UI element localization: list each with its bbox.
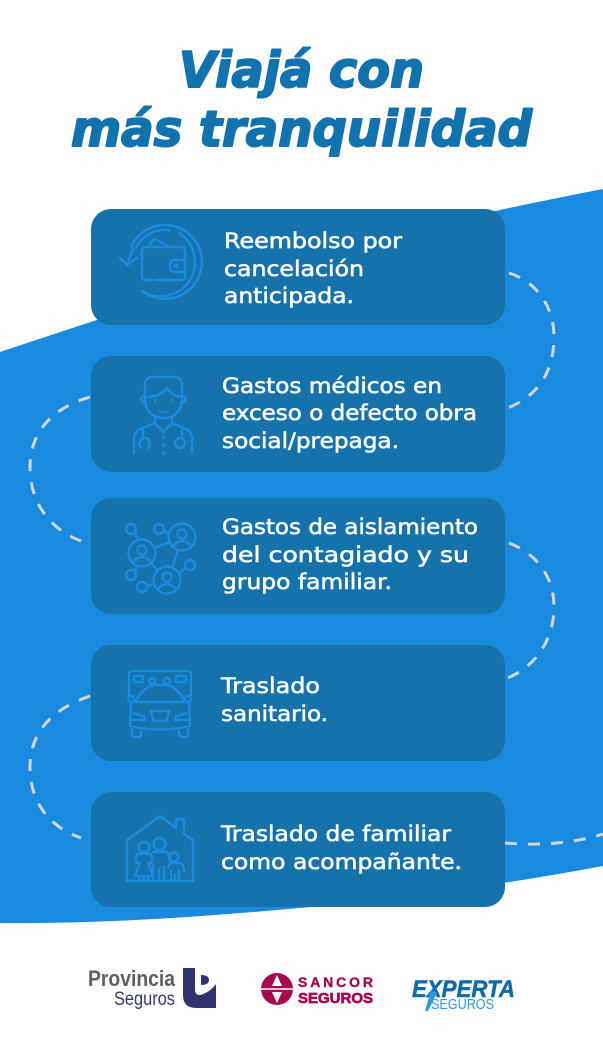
text: cancelación: [224, 257, 364, 281]
text: del contagiado y su: [222, 543, 469, 567]
logo: Experta Seguros: [412, 976, 515, 1013]
text: [220, 822, 462, 874]
icon: wallet with return arrow: [120, 225, 202, 299]
title: más tranquilidad: [71, 101, 533, 158]
text: Gastos de aislamiento: [222, 515, 478, 539]
icon: connected people network: [126, 524, 196, 594]
text: grupo familiar.: [222, 570, 392, 594]
logo: Provincia Seguros: Provincia: [88, 966, 176, 991]
icon: family in house: [127, 816, 193, 881]
text: [220, 674, 328, 726]
text: Reembolso por: [224, 229, 402, 253]
card 3: aislamiento: [91, 498, 505, 614]
icon: doctor: [134, 377, 192, 454]
logo: Sancor Seguros: SANCOR: [298, 974, 373, 990]
text: Traslado: [220, 674, 320, 698]
text: social/prepaga.: [222, 429, 399, 453]
logo: Provincia Seguros: [88, 966, 216, 1010]
text: como acompañante.: [221, 850, 462, 874]
logo: Provincia Seguros: Seguros: [114, 989, 175, 1010]
logo: Sancor Seguros: [261, 973, 373, 1007]
logo: Experta Seguros: EXPERTA: [412, 976, 515, 1003]
title: Viajá con: [179, 42, 424, 99]
card 1: reembolso: [91, 209, 505, 325]
text: exceso o defecto obra: [222, 401, 477, 425]
text: [222, 515, 478, 594]
icon: ambulance: [128, 671, 191, 737]
logo: Sancor Seguros: SEGUROS: [298, 990, 373, 1007]
card 2: gastos médicos: [91, 356, 505, 472]
text: Traslado de familiar: [220, 822, 451, 846]
blue background wave: [0, 189, 603, 923]
text: anticipada.: [224, 284, 354, 308]
text: Gastos médicos en: [222, 374, 442, 398]
card 5: traslado de familiar: [91, 792, 505, 907]
text: [224, 229, 402, 308]
card 4: traslado sanitario: [91, 645, 505, 761]
text: sanitario.: [221, 702, 328, 726]
logo: Experta Seguros: SEGUROS: [431, 996, 494, 1013]
title: [71, 42, 533, 158]
text: [222, 374, 477, 453]
dashed connector path: [30, 273, 603, 844]
